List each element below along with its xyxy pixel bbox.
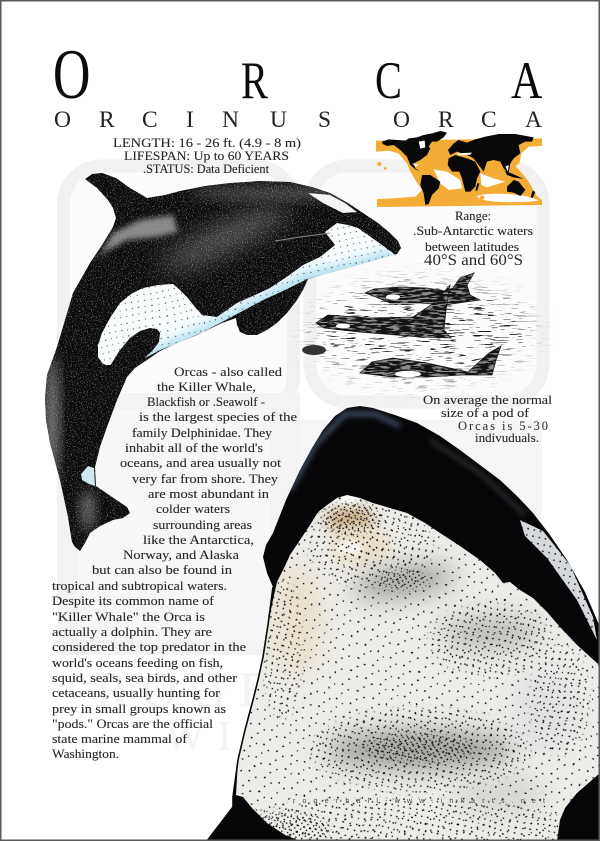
main text block: Blackfish or .Seawolf - [147, 395, 265, 409]
range text: Range: [455, 209, 491, 223]
main text block: cetaceans, usually hunting for [52, 686, 221, 700]
range text: between latitudes [425, 240, 519, 254]
title: O [53, 36, 90, 114]
orca white eye patches [336, 294, 421, 377]
watermark: rounded logo and wordmark [57, 166, 543, 760]
main text block: "pods." Orcas are the official [52, 717, 214, 731]
pod size note: indivuduals. [475, 431, 539, 445]
front orca [360, 346, 501, 377]
range text [413, 209, 533, 269]
back orca [365, 273, 480, 305]
main text block: very far from shore. They [132, 472, 279, 486]
orca pod illustration [285, 262, 557, 402]
map: continents [382, 131, 535, 205]
species facts: LIFESPAN: Up to 60 YEARS [124, 149, 289, 163]
head highlights [290, 414, 600, 645]
main text block: prey in small groups known as [52, 702, 226, 716]
watermark: rounded logo and wordmark: ROGER HALL [95, 661, 525, 717]
main text block: family Delphinidae. They [132, 426, 273, 440]
main text block: world's oceans feeding on fish, [52, 656, 223, 670]
main text block: Despite its common name of [52, 594, 215, 608]
middle orca [316, 285, 451, 338]
species facts: LENGTH: 16 - 26 ft. (4.9 - 8 m) [113, 136, 301, 150]
main text block: colder waters [156, 502, 230, 516]
sketch hatching on orcas [316, 274, 500, 377]
main text block: are most abundant in [148, 487, 270, 501]
artist credit: r o g e r h a l l - w w w . i n k a r t s . n e t [293, 798, 545, 805]
pod size note: Orcas is 5-30 [458, 419, 548, 433]
main text block: the Killer Whale, [157, 380, 256, 394]
title [53, 36, 542, 114]
main text block: oceans, and area usually not [120, 456, 282, 470]
pod size note: On average the normal [423, 393, 553, 407]
range text: 40°S and 60°S [424, 252, 523, 269]
body shading [40, 170, 405, 555]
title: A [511, 52, 542, 110]
map: ocean range in orange [376, 138, 542, 207]
stipple dots [230, 490, 600, 841]
main text block: state marine mammal of [52, 732, 188, 746]
leaping orca illustration [40, 170, 405, 555]
pod size note [423, 393, 553, 445]
main text block: like the Antarctica, [143, 533, 254, 547]
main text block: is the largest species of the [139, 410, 298, 424]
main text block [52, 365, 298, 761]
species facts: .STATUS: Data Deficient [143, 162, 270, 176]
body [45, 173, 401, 551]
main text block: "Killer Whale" the Orca is [52, 610, 205, 624]
main text block: Washington. [52, 747, 119, 761]
pectoral highlight [275, 233, 330, 241]
main text block: Orcas - also called [174, 365, 283, 379]
title: R [241, 52, 268, 110]
white face with soft tones [230, 490, 600, 841]
surfacing orca back [302, 345, 326, 355]
tail notch patch [81, 466, 95, 486]
species facts [113, 136, 301, 176]
title: C [375, 52, 402, 110]
white eye patch [308, 193, 357, 213]
main text block: Norway, and Alaska [123, 548, 240, 562]
orca head close-up [207, 406, 600, 841]
main text block: inhabit all of the world's [125, 441, 263, 455]
water streaks [285, 262, 557, 402]
subtitle: scientific name: ORCINUS ORCA [54, 107, 542, 133]
map: white specks [412, 141, 509, 172]
main text block: considered the top predator in the [52, 640, 247, 654]
range map [376, 131, 542, 207]
pod size note: size of a pod of [441, 406, 530, 420]
white belly and flank patch [90, 215, 400, 365]
head black outline [207, 406, 600, 841]
main text block: tropical and subtropical waters. [52, 579, 227, 593]
main text block: squid, seals, sea birds, and other [52, 671, 238, 685]
dark left edge line [207, 587, 273, 841]
map: white ocean gaps [434, 169, 539, 202]
range text: .Sub-Antarctic waters [413, 224, 533, 238]
main text block: actually a dolphin. They are [52, 625, 213, 639]
main text block: surrounding areas [153, 518, 252, 532]
map: orange islands [377, 162, 484, 200]
main text block: but can also be found in [92, 563, 233, 577]
gray saddle patch [93, 215, 178, 260]
watermark: rounded logo and wordmark: WILDLIFE [165, 714, 455, 760]
